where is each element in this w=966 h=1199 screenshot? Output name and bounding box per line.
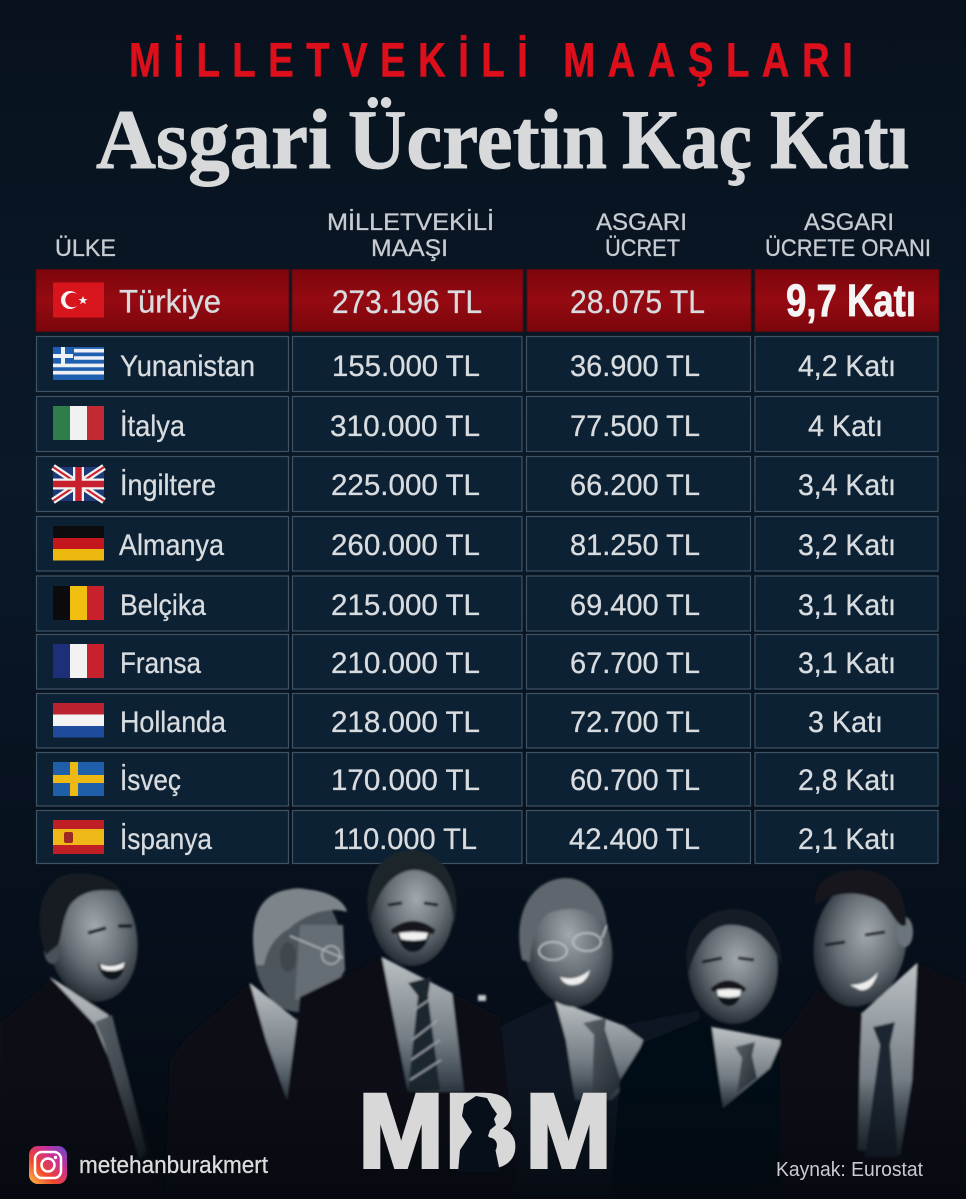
table header: ASGARI <box>596 209 687 236</box>
row: İspanya: 110.000 TL <box>333 823 477 856</box>
row: Yunanistan: 155.000 TL <box>332 350 480 383</box>
row: Almanya <box>36 516 938 571</box>
row: Fransa: 210.000 TL <box>331 647 480 680</box>
person 3 <box>280 850 520 1199</box>
row: İngiltere: İngiltere <box>120 469 216 502</box>
row: Hollanda: 3 Katı <box>808 706 883 739</box>
row: İspanya: 2,1 Katı <box>798 823 896 856</box>
table header <box>55 209 931 262</box>
row: Yunanistan: Yunanistan <box>120 350 255 383</box>
row: Fransa: 3,1 Katı <box>798 647 896 680</box>
row: İngiltere <box>36 456 938 512</box>
table header: MAAŞI <box>371 235 448 262</box>
row: Belçika: 215.000 TL <box>331 589 480 622</box>
heading: Asgari Ücretin Kaç Katı: Ücretin <box>348 93 607 187</box>
row: İsveç: İsveç <box>120 764 181 797</box>
row: Almanya: 260.000 TL <box>331 529 480 562</box>
logo: MBM <box>358 1073 612 1190</box>
title: Milletvekili Maaşları: MİLLETVEKİLİ MAAŞLARI <box>129 35 866 88</box>
row: Belçika: Belçika <box>120 589 206 622</box>
icon: flag of Germany <box>53 526 104 560</box>
row: Almanya: 81.250 TL <box>570 529 700 562</box>
row: Fransa: 67.700 TL <box>570 647 700 680</box>
row: Hollanda <box>36 694 938 748</box>
row: Türkiye: Türkiye <box>119 284 221 320</box>
source: Kaynak: Eurostat <box>776 1159 923 1181</box>
heading: Asgari Ücretin Kaç Katı: Katı <box>770 93 909 187</box>
icon: flag of Sweden <box>53 762 104 796</box>
row: İtalya <box>36 396 938 452</box>
icon: flag of the Netherlands <box>53 703 104 738</box>
row: Belçika: 3,1 Katı <box>798 589 896 622</box>
row: İsveç: 170.000 TL <box>331 764 480 797</box>
row: İspanya: İspanya <box>120 823 212 856</box>
icon: flag of Italy <box>53 406 104 440</box>
row: İsveç: 60.700 TL <box>570 764 700 797</box>
illustration: six laughing politicians <box>0 850 966 1199</box>
person 2 <box>165 888 347 1199</box>
icon: flag of Spain <box>53 820 104 854</box>
icon: flag of Türkiye <box>53 282 104 318</box>
table header: ÜLKE <box>55 235 116 262</box>
row: Yunanistan: 36.900 TL <box>570 350 700 383</box>
row: İngiltere: 225.000 TL <box>331 469 480 502</box>
row: İsveç: 2,8 Katı <box>798 764 896 797</box>
row: İtalya: İtalya <box>120 410 185 443</box>
row: Yunanistan <box>36 336 938 392</box>
instagram handle: metehanburakmert <box>79 1152 268 1179</box>
row: Türkiye: 273.196 TL <box>332 284 482 320</box>
person 4 <box>478 873 700 1199</box>
person 5 <box>610 909 790 1199</box>
logo: MBM: M <box>526 1073 612 1190</box>
person 6 <box>780 870 966 1199</box>
row: İngiltere: 66.200 TL <box>570 469 700 502</box>
row: Türkiye: 28.075 TL <box>570 284 705 320</box>
heading: Asgari Ücretin Kaç Katı: Kaç <box>622 93 752 187</box>
row: İsveç <box>36 752 938 806</box>
icon: flag of Belgium <box>53 586 104 620</box>
row: Hollanda: Hollanda <box>120 706 226 739</box>
row: İtalya: 4 Katı <box>808 410 883 443</box>
heading: Asgari Ücretin Kaç Katı: Asgari <box>96 93 331 187</box>
table header: ASGARI <box>804 209 894 236</box>
row: Türkiye <box>36 270 939 332</box>
row: Hollanda: 72.700 TL <box>570 706 700 739</box>
row: Türkiye: 9,7 Katı <box>786 275 916 326</box>
row: İspanya: 42.400 TL <box>569 823 700 856</box>
row: İtalya: 77.500 TL <box>570 410 700 443</box>
row: Fransa: Fransa <box>120 647 201 680</box>
row: Yunanistan: 4,2 Katı <box>798 350 896 383</box>
row: Belçika: 69.400 TL <box>570 589 700 622</box>
row: İtalya: 310.000 TL <box>330 410 480 443</box>
logo: MBM: B <box>445 1073 518 1190</box>
row: İspanya <box>36 810 938 864</box>
row: Hollanda: 218.000 TL <box>331 706 480 739</box>
row: Almanya: 3,2 Katı <box>798 529 896 562</box>
icon: flag of Greece <box>53 347 104 380</box>
row: İngiltere: 3,4 Katı <box>798 469 896 502</box>
icon: Instagram <box>29 1146 67 1184</box>
heading: Asgari Ücretin Kaç Katı <box>96 93 909 187</box>
person 1 <box>0 867 165 1199</box>
icon: flag of the United Kingdom <box>53 467 104 501</box>
table header: ÜCRET <box>605 235 680 262</box>
icon: flag of France <box>53 644 104 678</box>
row: Fransa <box>36 634 938 689</box>
table header: ÜCRETE ORANI <box>765 235 931 262</box>
logo: MBM: M <box>358 1073 444 1190</box>
row: Belçika <box>36 576 938 631</box>
row: Almanya: Almanya <box>119 529 224 562</box>
bottom fade <box>0 1080 966 1199</box>
table header: MİLLETVEKİLİ <box>327 209 494 236</box>
